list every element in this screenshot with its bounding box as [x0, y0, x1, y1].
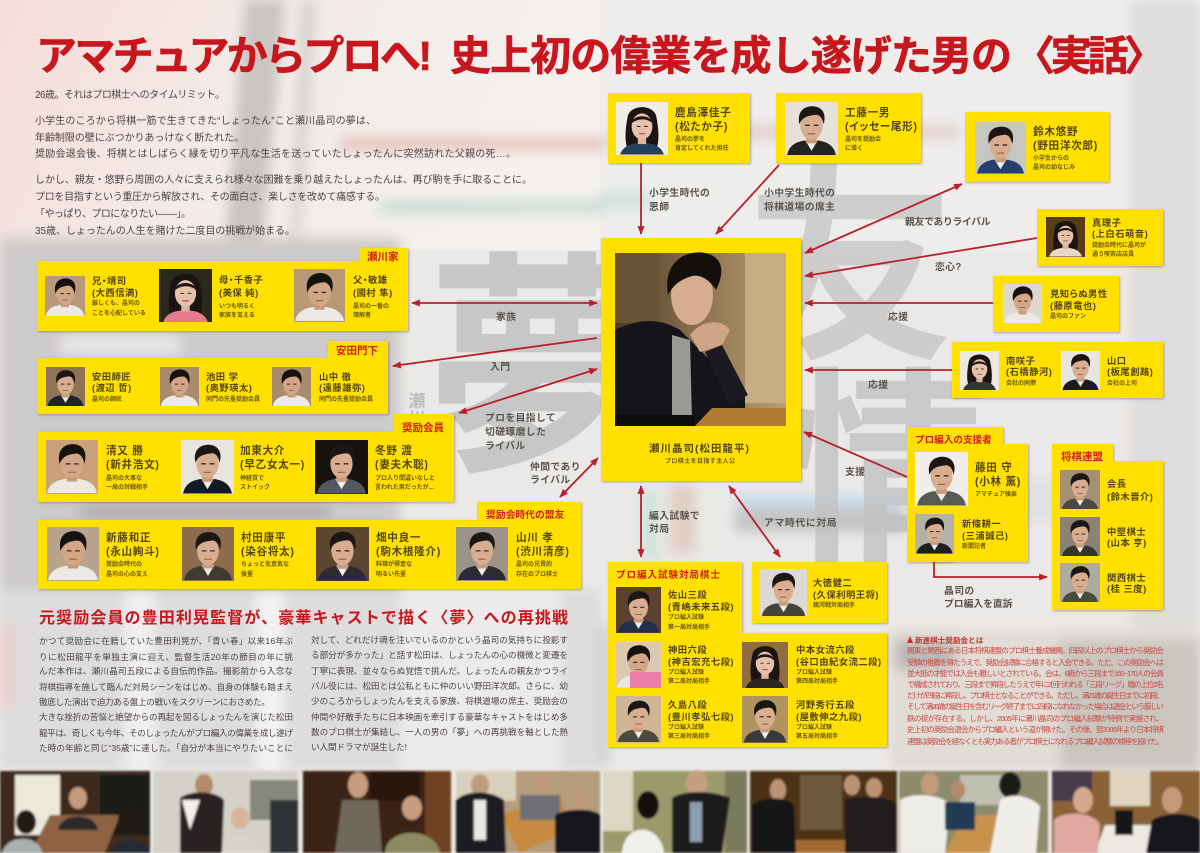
background collage: 友 [745, 152, 955, 387]
arrow labels: 入門 [490, 361, 510, 373]
panel: 将棋連盟 [1052, 444, 1163, 610]
card: 母・千香子: (美保 純) [219, 287, 259, 298]
note text: だけが四段に昇段し、プロ棋士となることができる。ただし、満21歳の誕生日までに初段、 [907, 690, 1164, 700]
card: 会長: (鈴木晋介) [1107, 491, 1153, 502]
still 1 [0, 771, 150, 853]
note text: 史上初の奨励会退会からプロ編入という道が開けた。その後、翌2006年より日本将棋 [907, 724, 1164, 734]
arrow labels: 親友でありライバル [905, 215, 991, 228]
card: 鹿島澤佳子: 鹿島澤佳子 [675, 106, 731, 119]
intro text: 奨励会退会後、将棋とはしばらく縁を切り平凡な生活を送っていたしょったんに突然訪れた父親の死…。 [35, 147, 516, 160]
card: 中本女流六段: (谷口由紀女流二段) [796, 656, 882, 667]
card: 神田六段: 第二局対局相手 [668, 677, 710, 685]
card: 父・敏雄: (國村 隼) [353, 287, 393, 298]
card: 加東大介 [181, 440, 305, 494]
card: 会長 [1060, 470, 1153, 509]
intro text: 「やっぱり、プロになりたい――」。 [35, 208, 191, 220]
body text column 2: バル役には、松田とは公私ともに仲のいい野田洋次郎。さらに、幼 [311, 680, 568, 691]
card: 大徳健二: 銀河戦対局相手 [813, 601, 855, 609]
card: 藤田 守: アマチュア強豪 [975, 490, 1017, 498]
arrow labels: 支援 [845, 465, 865, 478]
note: 新進棋士奨励会とは [907, 635, 1164, 746]
arrow labels: 家族 [496, 310, 516, 323]
card: 父・敏雄 [294, 269, 393, 322]
card: 真理子: 通う喫茶店店員 [1092, 250, 1134, 258]
photo strip: film stills [0, 770, 1200, 853]
card: 新藤和正: 奨励会時代の [106, 560, 142, 568]
card: 山川 孝: 晶司の兄貴的 [516, 560, 552, 568]
card: 真理子: (上白石萌音) [1092, 228, 1148, 239]
arrow labels: ライバル [530, 474, 571, 486]
body text column 1: 将棋指導を施して臨んだ対局シーンをはじめ、自身の体験も踏まえ [39, 681, 293, 692]
note text: そして満26歳の誕生日を含むリーグ終了までに四段になれなかった場合は退会という厳しい [907, 701, 1164, 711]
background collage: 瀬川 [406, 392, 425, 426]
card: 畑中良一: 畑中良一 [376, 531, 421, 544]
panel: 南咲子・山口 [952, 342, 1163, 398]
card: 関西棋士: 関西棋士 [1107, 572, 1146, 583]
arrow labels: 編入試験で [649, 509, 700, 522]
card: 鈴木悠野: 晶司の幼なじみ [1033, 163, 1075, 171]
panel: 安田門下: 安田門下 [336, 344, 378, 357]
note text: 受験の推薦を得たうえで、奨励会試験に合格すると入会できる。ただ、この奨励会へは [907, 657, 1164, 667]
card: 中堅棋士 [1060, 517, 1147, 556]
card: 中本女流六段: 第四局対局相手 [796, 677, 838, 685]
card: 大徳健二: (久保利明王将) [813, 589, 879, 600]
card: 池田 学 [160, 367, 260, 406]
card: 藤田 守 [915, 452, 1021, 506]
card: 見知らぬ男性 [993, 276, 1119, 332]
arrow labels: 対局 [649, 522, 669, 535]
card: 冬野 渡: 言われた男だったが… [375, 483, 435, 491]
panel: 瀬川家: 瀬川家 [367, 250, 399, 263]
card: 山中 徹 [272, 367, 373, 406]
background collage: 情 [785, 355, 995, 590]
card: 安田師匠 [46, 367, 132, 406]
card: 新條耕一: (三浦誠己) [962, 530, 1008, 541]
still 6 [750, 771, 897, 853]
body text column 2: い人間ドラマが誕生した! [311, 741, 407, 752]
note text [907, 645, 1164, 746]
card: 工藤一男: に導く [845, 144, 863, 152]
panel: 奨励会時代の盟友: 奨励会時代の盟友 [486, 508, 565, 521]
arrow labels: アマ時代に対局 [764, 516, 837, 529]
card: 新藤和正: (永山絢斗) [106, 545, 160, 558]
arrow labels: 仲間であり [530, 460, 581, 473]
card: 父・敏雄: 晶司の一番の [353, 302, 389, 310]
intro text [35, 88, 532, 237]
panel: 奨励会時代の盟友 [38, 502, 581, 589]
panel: プロ編入試験対局棋士: プロ編入試験対局棋士 [616, 569, 720, 581]
panel: プロ編入試験対局棋士 [608, 562, 887, 747]
arrow labels [485, 186, 1013, 610]
card: 新條耕一: 新條耕一 [962, 518, 1001, 529]
intro text: 26歳。それはプロ棋士へのタイムリミット。 [35, 88, 225, 101]
card: 中堅棋士: 中堅棋士 [1107, 526, 1146, 537]
arrow labels: 晶司の [944, 585, 975, 597]
card: 畑中良一: (駒木根隆介) [376, 545, 441, 558]
still 7 [899, 771, 1048, 853]
card: 兄・靖司 [45, 275, 146, 317]
note text: で構成されており、三段まで昇段したうえで年に2回行われる「三段リーグ」戦の上位2名 [907, 679, 1164, 689]
note text: 関東と関西にある日本将棋連盟のプロ棋士養成機関。四段以上のプロ棋士から奨励会 [907, 645, 1164, 655]
body text column 2: 丁寧に表現、並々ならぬ覚悟で挑んだ。しょったんの親友かつライ [311, 665, 568, 676]
card: 母・千香子: 母・千香子 [219, 274, 263, 285]
body text column 1: かつて奨励会に在籍していた豊田利晃が、「青い春」以来16年ぶ [39, 635, 293, 646]
card: 関西棋士: (桂 三度) [1107, 583, 1147, 594]
arrow labels: 小中学生時代の [764, 186, 835, 199]
card: 加東大介: 神経質で [240, 474, 264, 482]
intro text: プロを目指すという重圧から解放され、その面白さ、楽しさを改めて痛感する。 [35, 190, 385, 203]
panel: プロ編入の支援者: プロ編入の支援者 [915, 434, 992, 446]
arrow labels: プロを目指して [485, 411, 556, 424]
card: 中本女流六段 [742, 642, 882, 688]
body text column 1: た時の年齢と同じ“35歳”に達した。「自分が本当にやりたいことに [39, 742, 293, 753]
card: 加東大介: 加東大介 [240, 444, 285, 457]
card: 鈴木悠野: (野田洋次郎) [1033, 139, 1098, 152]
card: 南咲子: (石橋静河) [1006, 366, 1052, 377]
card: 清又 勝: 一局の対戦相手 [106, 483, 148, 491]
card: 中本女流六段: プロ編入試験 [796, 668, 832, 676]
card: 新藤和正 [47, 527, 160, 581]
card: 久島八段 [616, 696, 734, 743]
panel: 将棋連盟: 将棋連盟 [1061, 450, 1103, 463]
card: 大徳健二 [752, 562, 887, 623]
card: 冬野 渡: (妻夫木聡) [375, 458, 429, 471]
card: 池田 学: 池田 学 [206, 371, 238, 382]
panel: 奨励会員: 奨励会員 [402, 421, 444, 434]
card: 南咲子: 会社の同僚 [1006, 379, 1036, 387]
photo: 瀬川晶司 [615, 252, 786, 426]
card: 山川 孝 [456, 527, 570, 581]
card: 畑中良一: 料理が得意な [376, 560, 412, 568]
card: 工藤一男: (イッセー尾形) [845, 121, 918, 133]
card: 山口: 会社の上司 [1107, 379, 1137, 387]
body text column 1: 徹底した演出で迫力ある盤上の戦いをスクリーンにおさめた。 [39, 696, 270, 707]
card: 鹿島澤佳子: 肯定してくれた担任 [675, 144, 729, 152]
background collage: 夢 [425, 239, 661, 503]
card: 鹿島澤佳子: (松たか子) [675, 120, 728, 133]
card: 鹿島澤佳子 [608, 93, 750, 163]
card: 鈴木悠野: 小学生からの [1033, 154, 1069, 162]
card: 佐山三段: (青嶋未来五段) [668, 601, 734, 612]
card: 山中 徹: 同門の先輩奨励会員 [319, 395, 373, 403]
card: 佐山三段: 第一局対局相手 [668, 623, 710, 631]
card: 冬野 渡: 冬野 渡 [375, 444, 413, 457]
card: 清又 勝: (新井浩文) [106, 458, 160, 471]
arrow labels: プロ編入を直訴 [944, 597, 1013, 610]
card: 中堅棋士: (山本 亨) [1107, 537, 1147, 548]
card: 久島八段: プロ編入試験 [668, 723, 704, 731]
card: 畑中良一: 明るい先輩 [376, 570, 406, 578]
intro text: 35歳、しょったんの人生を賭けた二度目の挑戦が始まる。 [35, 224, 295, 237]
card: 関西棋士 [1060, 563, 1147, 602]
card: 神田六段: (神吉宏充七段) [668, 656, 734, 667]
card: protagonist [601, 238, 801, 481]
body text column 1: 大きな挫折の苦悩と絶望からの再起を図るしょったんを演じた松田 [39, 711, 293, 722]
card: 畑中良一 [316, 527, 441, 581]
arrow labels: 応援 [868, 378, 888, 391]
card: 藤田 守: (小林 薫) [975, 475, 1021, 488]
card: 父・敏雄: 理解者 [353, 311, 371, 319]
body text column 1 [39, 635, 293, 753]
intro text: 年齢制限の壁にぶつかりあっけなく断たれた。 [35, 131, 244, 144]
arrow labels: 小学生時代の [649, 186, 710, 199]
role: プロ棋士を目指す主人公 [665, 457, 735, 465]
card: 南咲子: 南咲子 [1006, 355, 1035, 366]
still 8 [1052, 771, 1200, 853]
panel: 安田門下 [37, 341, 388, 414]
card: 安田師匠: 安田師匠 [92, 371, 131, 382]
card: 母・千香子 [159, 269, 263, 322]
card: 冬野 渡 [315, 440, 435, 494]
card: 久島八段: 第三局対局相手 [668, 732, 710, 740]
card: 河野秀行五段: 第五局対局相手 [796, 732, 838, 740]
still 2 [153, 771, 298, 853]
card: 山口: 山口 [1107, 356, 1127, 366]
still 3 [303, 771, 451, 853]
card: 会長: 会長 [1107, 478, 1127, 489]
title [36, 33, 1165, 79]
card: 新條耕一 [915, 514, 1008, 554]
card: 藤田 守: 藤田 守 [975, 461, 1013, 474]
card: 新藤和正: 晶司の心の支え [106, 570, 148, 578]
panel: プロ編入の支援者 [907, 427, 1028, 562]
card: 鹿島澤佳子: 晶司の夢を [675, 135, 705, 143]
card: 新藤和正: 新藤和正 [106, 531, 151, 544]
card: 清又 勝 [46, 440, 160, 494]
card: 工藤一男: 晶司を奨励会 [845, 135, 881, 143]
section heading: 元奨励会員の豊田利晃監督が、豪華キャストで描く〈夢〉への再挑戦 [39, 608, 568, 627]
card: 中本女流六段: 中本女流六段 [796, 644, 855, 655]
card: 真理子: 奨励会時代に晶司が [1092, 241, 1146, 249]
card: 真理子: 真理子 [1092, 217, 1121, 228]
card: 清又 勝: 清又 勝 [106, 444, 144, 457]
card: 佐山三段: プロ編入試験 [668, 613, 704, 621]
card: 工藤一男 [776, 93, 921, 163]
card: 見知らぬ男性: 見知らぬ男性 [1050, 288, 1108, 299]
note text: 並大抵の才能では入会も難しいとされている。会は、6級から三段まで160~170人の会員 [907, 668, 1164, 678]
card: 鈴木悠野 [965, 112, 1109, 182]
intro text: 小学生のころから将棋一筋で生きてきた“しょったん”こと瀬川晶司の夢は、 [35, 114, 376, 127]
card: 工藤一男: 工藤一男 [845, 107, 890, 119]
still 5 [603, 770, 747, 853]
body text column 2 [311, 634, 568, 752]
card: 鈴木悠野: 鈴木悠野 [1033, 125, 1078, 138]
note text: 鉄の掟が存在する。しかし、2005年に瀬川晶司のプロ編入試験が特例で実施され、 [907, 713, 1164, 723]
card: 村田康平: 後輩 [241, 570, 253, 578]
card: 清又 勝: 晶司の大事な [106, 474, 142, 482]
arrow labels: ライバル [485, 440, 526, 452]
body text column 2: る部分が多かった」と話す松田は、しょったんの心の機微と変遷を [311, 649, 568, 660]
card: 見知らぬ男性: (藤原竜也) [1050, 300, 1096, 311]
card: 山中 徹: (遠藤雄弥) [319, 382, 365, 393]
card: 山中 徹: 山中 徹 [319, 371, 352, 382]
card: 神田六段: 神田六段 [668, 644, 707, 655]
title: アマチュアからプロへ! [36, 33, 432, 79]
card: 安田師匠: 晶司の師匠 [92, 395, 122, 403]
card: 河野秀行五段 [742, 696, 862, 743]
card: 父・敏雄: 父・敏雄 [353, 274, 388, 285]
card: 池田 学: 同門の先輩奨励会員 [206, 395, 260, 403]
card: 久島八段: 久島八段 [668, 699, 707, 710]
card: 河野秀行五段: (屋敷伸之九段) [796, 711, 862, 722]
intro text: しかし、親友・悠野ら周囲の人々に支えられ様々な困難を乗り越えたしょったんは、再び駒を手に取ることに。 [35, 173, 532, 186]
card: 加東大介: ストイック [240, 483, 270, 491]
panel: 奨励会員 [38, 414, 454, 502]
note heading: 新進棋士奨励会とは [915, 635, 984, 645]
arrow labels: 切磋琢磨した [485, 425, 546, 438]
card: 兄・靖司: 兄・靖司 [92, 275, 127, 286]
card: 山口: (板尾創路) [1107, 366, 1153, 377]
card: 山川 孝: 山川 孝 [516, 531, 554, 544]
card: 久島八段: (豊川孝弘七段) [668, 711, 734, 722]
card: 冬野 渡: プロ入り間違いなしと [375, 474, 435, 482]
still 4 [456, 771, 600, 853]
card: 加東大介: (早乙女太一) [240, 458, 305, 471]
arrow labels: 応援 [888, 310, 908, 323]
body text column 2: 対して、どれだけ魂を注いでいるのかという晶司の気持ちに投影す [311, 634, 568, 645]
name: 瀬川晶司(松田龍平) [649, 442, 749, 455]
card: 佐山三段 [616, 587, 734, 633]
note icon [907, 636, 913, 643]
card: 池田 学: (奥野瑛太) [206, 382, 252, 393]
card: 村田康平: (染谷将太) [241, 545, 295, 558]
card: 佐山三段: 佐山三段 [668, 589, 707, 600]
body text column 2: 仲間や好敵手たちに日本映画を牽引する豪華なキャストをはじめ多 [311, 711, 568, 722]
card: 南咲子 [960, 351, 1052, 390]
card: 村田康平: ちょっと生意気な [241, 560, 289, 568]
card: 真理子 [1037, 209, 1163, 266]
card: 山川 孝: 存在のプロ棋士 [516, 570, 558, 578]
card: 見知らぬ男性: 晶司のファン [1050, 313, 1086, 320]
card: 山川 孝: (渋川清彦) [516, 545, 570, 558]
note text: 連盟は奨励会を経なくとも実力ある者がプロ棋士になれるプロ編入試験の規程を設けた。 [907, 736, 1164, 746]
arrow labels: 将棋道場の席主 [764, 200, 835, 213]
card: 兄・靖司: 厳しくも、晶司の [92, 299, 140, 307]
card: 母・千香子: 家族を支える [219, 311, 255, 319]
card: 山口 [1061, 351, 1153, 390]
card: 新條耕一: 新聞記者 [962, 542, 986, 550]
arrows [393, 163, 1047, 577]
card: 大徳健二: 大徳健二 [813, 577, 852, 588]
card: 母・千香子: いつも明るく [219, 303, 255, 310]
card: 神田六段 [616, 642, 734, 688]
card: 村田康平 [182, 527, 295, 581]
arrow labels: 恩師 [649, 200, 669, 213]
arrow labels: 恋心? [935, 260, 962, 273]
body text column 1: りに松田龍平を単独主演に迎え、監督生活20年の節目の年に挑 [39, 651, 293, 662]
title: 史上初の偉業を成し遂げた男の [450, 33, 1012, 79]
body text column 1: んだ本作は、瀬川晶司五段による自伝的作品。撮影前から入念な [39, 665, 293, 676]
card: 神田六段: プロ編入試験 [668, 668, 704, 676]
body text column 2: 数のプロ棋士が集結し、一人の男の「夢」への再挑戦を軸とした熱 [311, 726, 568, 737]
card: 河野秀行五段: 河野秀行五段 [796, 699, 855, 710]
card: 安田師匠: (渡辺 哲) [92, 382, 132, 393]
panel: 瀬川家 [37, 248, 408, 331]
body text column 2: 少のころからしょったんを支える家族、将棋道場の席主、奨励会の [311, 695, 568, 706]
body text column 1: 龍平は、奇しくも今年、そのしょったんがプロ編入の偉業を成し遂げ [39, 727, 293, 738]
title: 〈実話〉 [1014, 33, 1165, 79]
card: 村田康平: 村田康平 [241, 531, 286, 544]
card: 兄・靖司: (大西信満) [92, 287, 138, 298]
card: 河野秀行五段: プロ編入試験 [796, 723, 832, 731]
card: 兄・靖司: ことを心配している [92, 309, 146, 317]
